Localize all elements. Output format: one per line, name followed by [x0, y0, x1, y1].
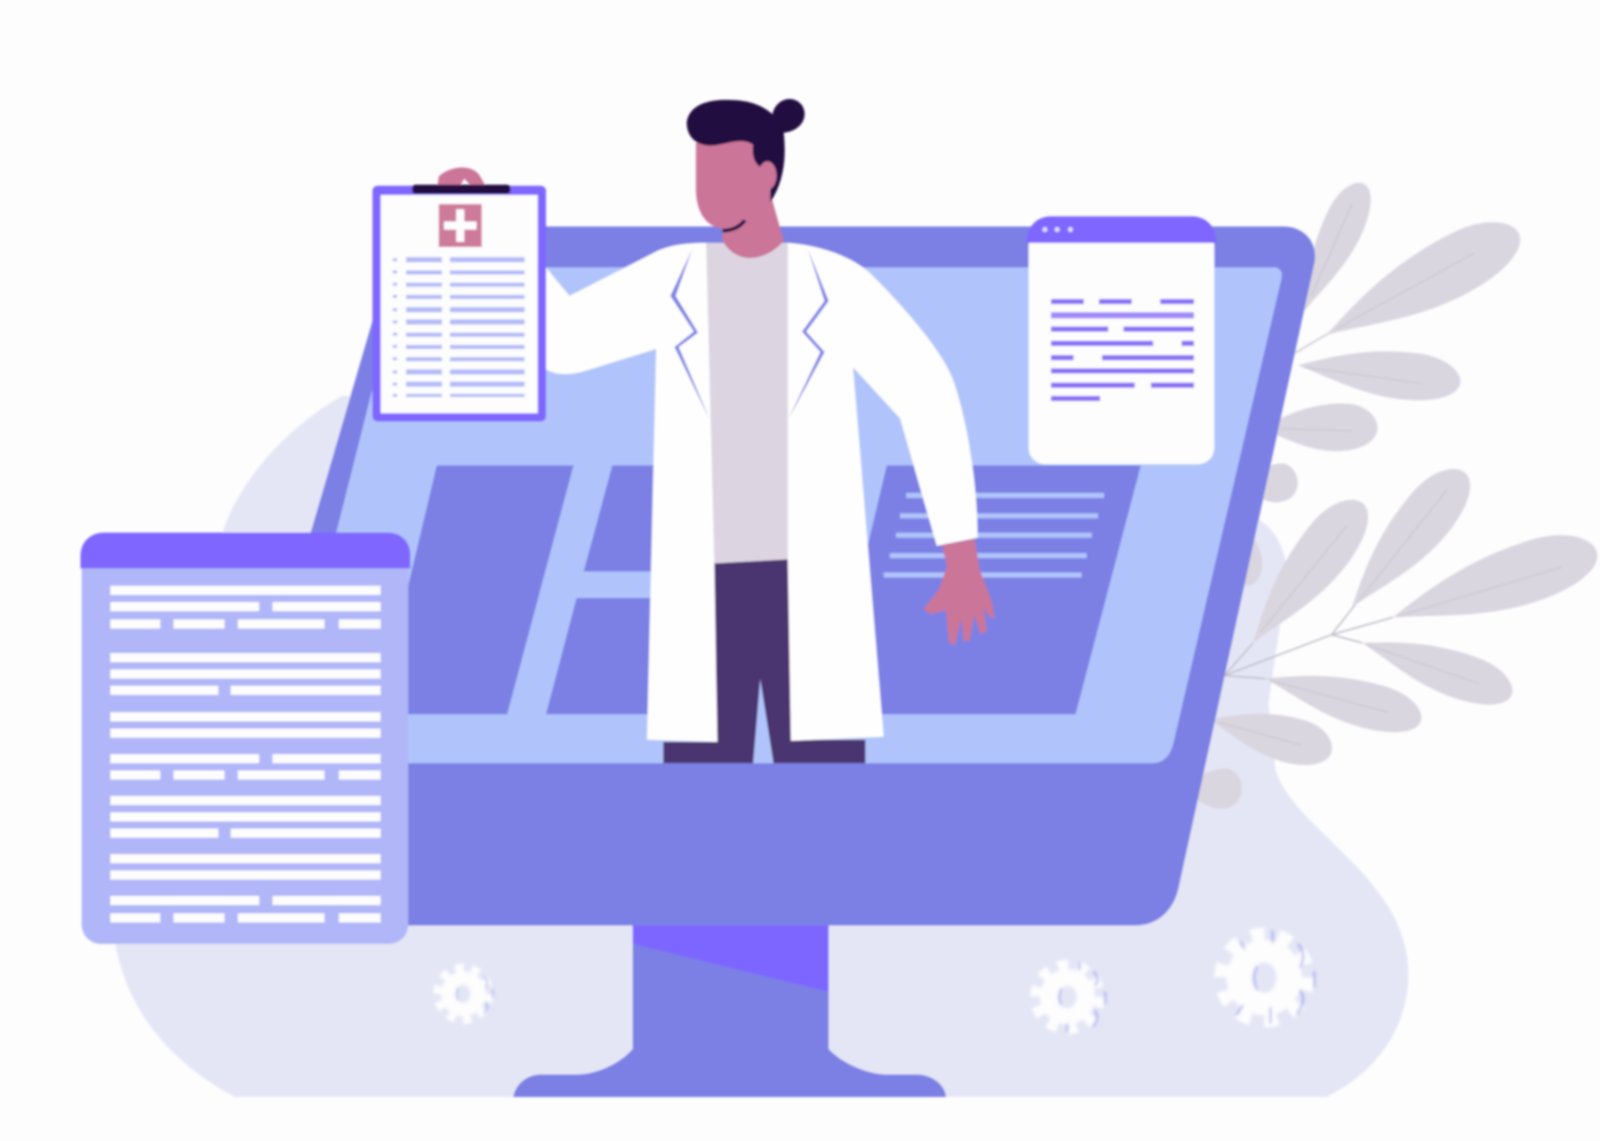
plant: lower branch — [1184, 455, 1600, 809]
clipboard paper — [381, 195, 538, 413]
panel header — [81, 533, 410, 568]
lab coat left side and arm — [546, 243, 717, 742]
leaf G — [1184, 768, 1242, 809]
lab coat right side and arm — [788, 243, 978, 741]
plant: upper branch — [1238, 175, 1532, 505]
chart lines — [393, 257, 524, 397]
leaf E — [1260, 654, 1427, 743]
stand shadow — [633, 923, 829, 992]
monitor — [204, 227, 1315, 1097]
doctor — [546, 99, 995, 763]
leaf 3 — [1295, 339, 1463, 406]
monitor body — [204, 227, 1315, 925]
leaf 2 — [1311, 206, 1532, 359]
leaf 5 — [1238, 462, 1299, 505]
veins lower — [1219, 490, 1561, 745]
window text lines — [1051, 299, 1194, 401]
monitor stand — [513, 918, 946, 1097]
clipboard — [372, 168, 546, 421]
screen panel middle top — [584, 465, 694, 571]
leaf A — [1230, 486, 1383, 658]
panel text lines — [110, 586, 381, 922]
document panel: right window — [1027, 216, 1216, 464]
screen panel left — [378, 465, 573, 714]
small hidden leaf — [1218, 537, 1264, 587]
left lapel — [670, 250, 709, 418]
t-shirt — [704, 243, 790, 563]
holding fingers — [437, 168, 488, 192]
window dots — [1042, 227, 1073, 232]
veins upper — [1281, 204, 1474, 431]
right lapel — [789, 250, 829, 418]
panel body — [82, 551, 408, 944]
upper branch stem — [1288, 329, 1337, 357]
clipboard board — [372, 186, 546, 421]
lower branch stem — [1224, 602, 1393, 679]
gear medium — [1036, 962, 1105, 1033]
right hand — [923, 539, 995, 645]
background blob — [115, 396, 1408, 1097]
screen panel right — [816, 465, 1141, 714]
leaf F — [1204, 695, 1338, 774]
gear small — [438, 968, 493, 1019]
hair — [687, 99, 805, 202]
window body — [1029, 230, 1214, 464]
leaf 4 — [1260, 402, 1378, 452]
gears — [438, 931, 1314, 1033]
monitor screen — [265, 267, 1282, 763]
medical cross icon — [439, 204, 482, 247]
trousers — [663, 559, 865, 763]
window header — [1027, 216, 1216, 243]
screen panel middle bottom — [546, 598, 694, 714]
leaf D — [1355, 619, 1520, 716]
leaf B — [1330, 455, 1485, 623]
chin shadow — [722, 220, 745, 231]
clip — [412, 185, 510, 194]
leaf C — [1383, 522, 1600, 643]
gear large — [1221, 931, 1314, 1023]
neck and face — [696, 133, 784, 258]
document panel: left text window — [81, 533, 410, 944]
screen panel lines — [884, 493, 1104, 578]
leaf 1 — [1284, 175, 1382, 319]
ear — [758, 161, 777, 190]
